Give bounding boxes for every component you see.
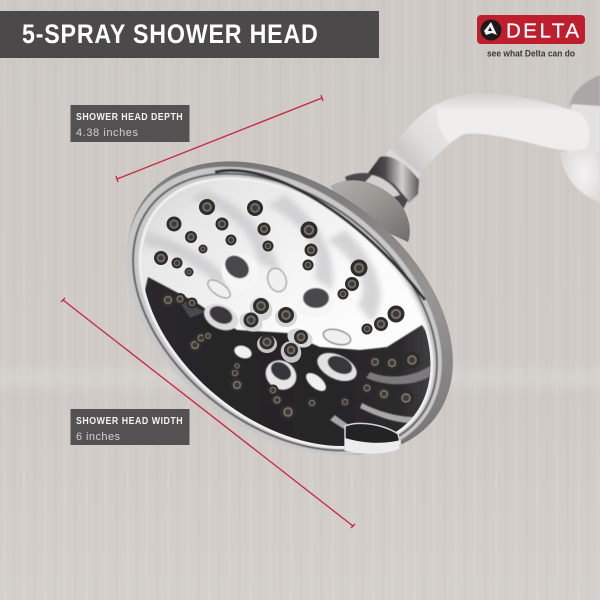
label: shower head depth [70, 105, 190, 142]
collar nut [345, 157, 419, 215]
title banner [0, 11, 379, 58]
upper spray nozzles [154, 199, 404, 334]
label: shower head width: 6 inches [76, 431, 120, 443]
label: shower head width: SHOWER HEAD WIDTH [76, 415, 183, 427]
spray selector tab [345, 423, 401, 454]
medium centre outlets [236, 293, 315, 367]
chrome rim [71, 107, 497, 515]
spray face [142, 180, 430, 446]
logo: Delta: DELTA [506, 20, 579, 42]
large scalloped outlets [200, 246, 361, 396]
width dimension line [61, 298, 355, 528]
shower arm [386, 94, 589, 179]
dark lower reflection [144, 276, 430, 446]
light streaks [181, 301, 430, 430]
swirl shading [145, 190, 380, 322]
label: shower head width [70, 409, 190, 445]
depth dimension line [116, 95, 323, 182]
logo: Delta: see what Delta can do [487, 48, 575, 60]
label: shower head depth: SHOWER HEAD DEPTH [76, 111, 183, 123]
title banner: 5-SPRAY SHOWER HEAD [22, 19, 318, 49]
wall flange [560, 75, 600, 202]
lower spray nozzles [161, 293, 420, 420]
logo: Delta [477, 15, 585, 60]
teardrop highlights [205, 266, 352, 394]
label: shower head depth: 4.38 inches [76, 127, 138, 139]
shower head body [71, 101, 509, 515]
